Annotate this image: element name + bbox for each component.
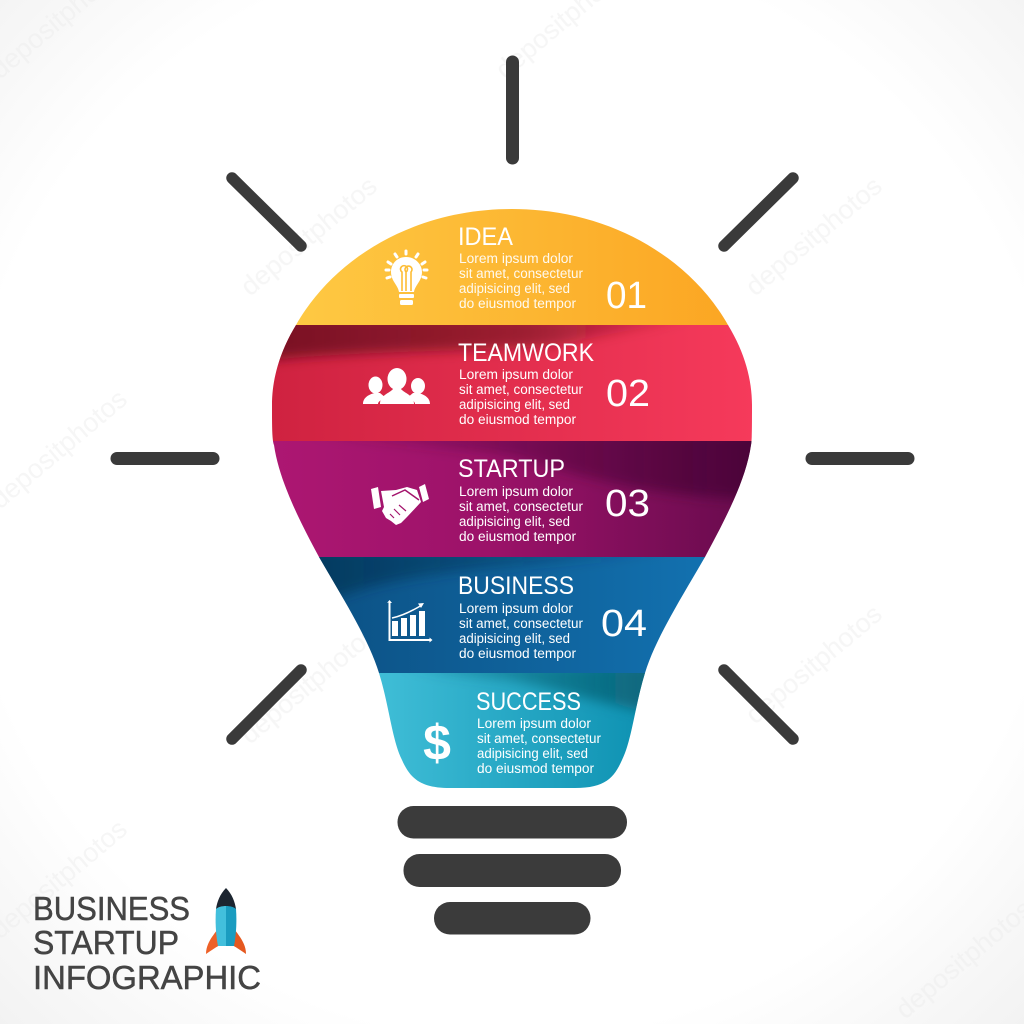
icon: chart [387, 600, 432, 642]
text: business: adipisicing elit, sed [459, 631, 570, 646]
band 5 success [379, 673, 645, 788]
band 4 business [319, 557, 705, 674]
text: startup: Lorem ipsum dolor [459, 484, 574, 499]
icon: handshake [371, 484, 429, 525]
text: idea: sit amet, consectetur [459, 266, 583, 281]
text: idea: do eiusmod tempor [459, 296, 577, 311]
text: depositphotos [235, 619, 383, 750]
text: success: SUCCESS [476, 688, 581, 716]
icon: lightbulb [386, 251, 427, 305]
band 1 idea [296, 209, 728, 326]
text: business: do eiusmod tempor [459, 646, 577, 661]
text: depositphotos [740, 171, 888, 302]
text: teamwork: TEAMWORK [458, 339, 594, 367]
text: startup: 03 [605, 483, 650, 525]
band 2 teamwork [272, 325, 752, 441]
icon: dollar: $ [423, 715, 451, 771]
text: startup: do eiusmod tempor [459, 529, 577, 544]
bulb base [398, 806, 627, 934]
light rays [117, 62, 908, 739]
text: startup: sit amet, consectetur [459, 499, 583, 514]
title [33, 890, 261, 996]
text: teamwork [458, 339, 650, 427]
text: teamwork: adipisicing elit, sed [459, 397, 570, 412]
text: business: Lorem ipsum dolor [459, 601, 574, 616]
text: success: sit amet, consectetur [477, 731, 601, 746]
title: STARTUP [33, 924, 179, 961]
text: startup [458, 455, 650, 544]
title: INFOGRAPHIC [33, 959, 261, 996]
text: depositphotos [235, 171, 383, 302]
text: business [458, 572, 647, 661]
text: success: adipisicing elit, sed [477, 746, 588, 761]
text: business: 04 [601, 603, 647, 645]
text: idea [458, 223, 647, 317]
band 3 startup [273, 441, 752, 558]
text: idea: IDEA [458, 223, 513, 251]
title: BUSINESS [33, 890, 190, 927]
text: success [476, 688, 601, 776]
text: idea: adipisicing elit, sed [459, 281, 570, 296]
text: teamwork: do eiusmod tempor [459, 412, 577, 427]
text: depositphotos [740, 599, 888, 730]
icon: rocket [206, 888, 246, 954]
text: success: Lorem ipsum dolor [477, 716, 592, 731]
text: idea: 01 [606, 275, 647, 317]
text: teamwork: 02 [606, 373, 650, 415]
text: business: BUSINESS [458, 572, 574, 600]
text: startup: adipisicing elit, sed [459, 514, 570, 529]
text: business: sit amet, consectetur [459, 616, 583, 631]
text: startup: STARTUP [458, 455, 565, 483]
text: success: do eiusmod tempor [477, 761, 595, 776]
text: teamwork: sit amet, consectetur [459, 382, 583, 397]
icon: team [363, 368, 430, 404]
bulb bands [250, 205, 770, 793]
text: idea: Lorem ipsum dolor [459, 251, 574, 266]
text: teamwork: Lorem ipsum dolor [459, 367, 574, 382]
